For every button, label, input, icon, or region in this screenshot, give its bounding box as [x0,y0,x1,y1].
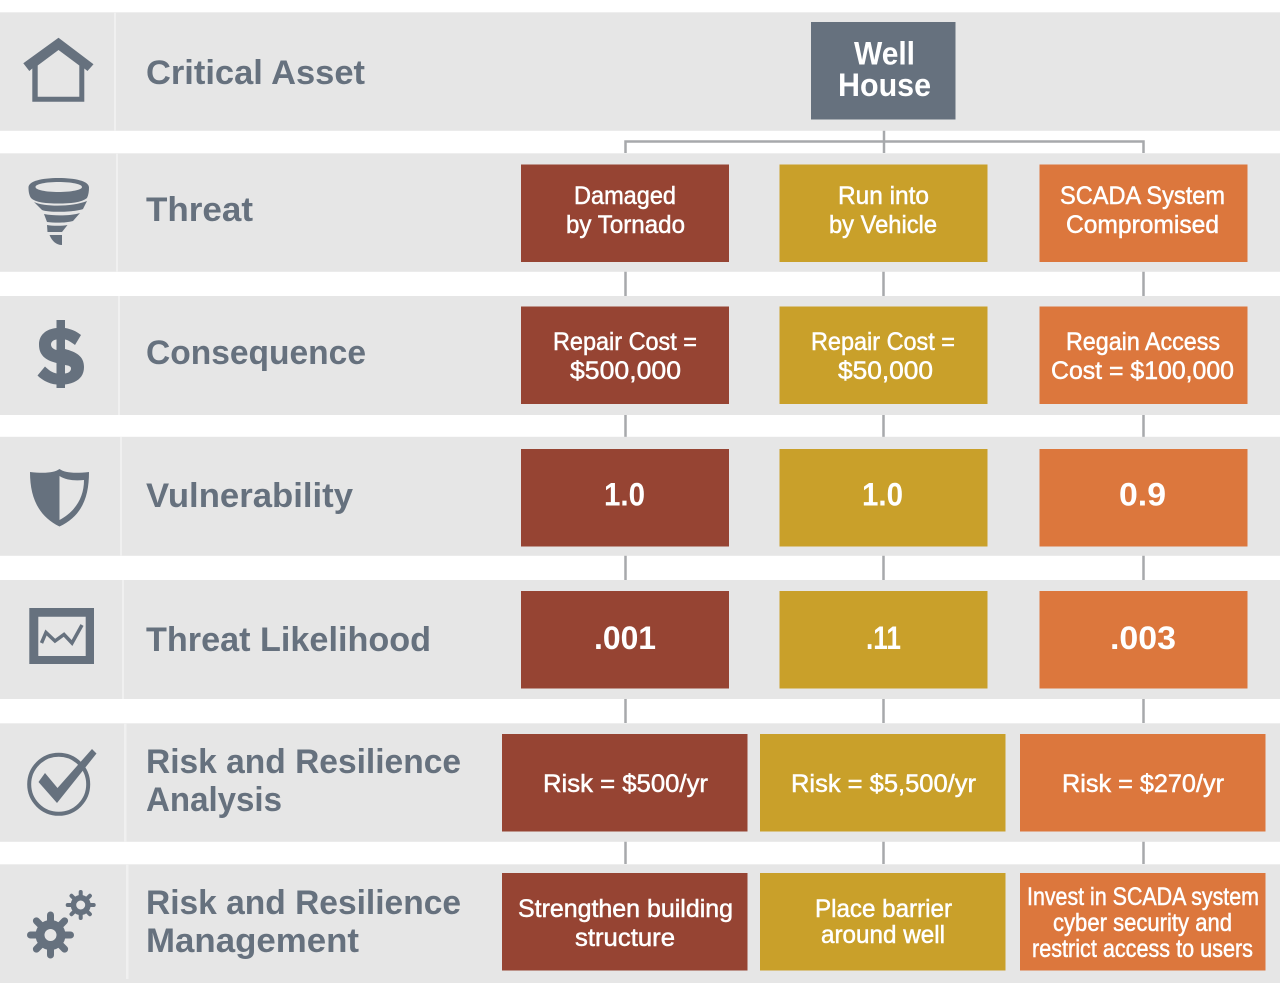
connector lines [626,130,1144,864]
box: risk 270 [1020,734,1266,832]
box: likelihood .001: .001 [594,620,656,656]
row: critical asset [0,12,1280,131]
box: vulnerability 1.0 [780,449,988,546]
box: vulnerability 0.9 [1040,449,1248,546]
box: repair cost 50,000: Repair Cost = [811,328,955,356]
icon: check mark circle [29,749,97,814]
row: risk and resilience analysis [0,723,1280,842]
icon: house [23,38,93,102]
box: repair cost 500,000: $500,000 [570,357,681,385]
row: threat [0,153,1280,272]
box: run into by vehicle: by Vehicle [829,211,937,239]
box: likelihood .003 [1040,591,1248,688]
box: risk 5,500: Risk = $5,500/yr [791,770,976,798]
heading: risk and resilience analysis [146,743,461,819]
icon: line chart [29,608,94,664]
row: risk and resilience management [0,864,1280,983]
box: well house [811,22,956,120]
box: repair cost 50,000: $50,000 [838,357,933,385]
row: consequence [0,296,1280,415]
heading: threat: Threat [146,191,253,229]
box: vulnerability 1.0: 1.0 [862,476,903,512]
heading: consequence: Consequence [146,334,366,372]
box: damaged by tornado: by Tornado [566,211,685,239]
heading: risk and resilience management: Management [146,922,359,960]
box: repair cost 50,000 [780,306,988,404]
box: run into by vehicle [780,164,988,262]
box: likelihood .11: .11 [866,620,901,656]
box: invest in scada: cyber security and [1053,909,1232,937]
box: regain access cost: Regain Access [1066,328,1220,356]
box: strengthen building structure [502,873,748,970]
icon: dollar sign [38,320,84,388]
box: vulnerability 1.0 [521,449,729,546]
heading: risk and resilience management [146,884,461,960]
box: risk 500: Risk = $500/yr [543,770,708,798]
box: scada system compromised: SCADA System [1060,182,1225,210]
box: repair cost 500,000 [521,306,729,404]
icon: gears [30,892,94,955]
box: damaged by tornado: Damaged [574,182,676,210]
box: invest in scada [1020,873,1266,970]
box: repair cost 500,000: Repair Cost = [553,328,697,356]
box: regain access cost [1040,306,1248,404]
box: risk 270: Risk = $270/yr [1062,770,1224,798]
heading: vulnerability: Vulnerability [146,477,353,515]
box: well house: House [838,67,931,103]
box: strengthen building structure: structure [575,924,675,952]
heading: threat likelihood: Threat Likelihood [146,621,431,659]
box: place barrier around well [760,873,1006,970]
row: threat likelihood [0,580,1280,699]
box: scada system compromised [1040,164,1248,262]
box: run into by vehicle: Run into [838,182,929,210]
box: likelihood .001 [521,591,729,688]
heading: risk and resilience management: Risk and Resilience [146,884,461,922]
box: likelihood .11 [780,591,988,688]
box: strengthen building structure: Strengthen building [518,895,733,923]
box: vulnerability 0.9: 0.9 [1119,476,1166,512]
box: place barrier around well: around well [821,921,945,949]
box: likelihood .003: .003 [1110,620,1176,656]
icon: shield [30,469,89,526]
heading: risk and resilience analysis: Risk and Resilience [146,743,461,781]
box: vulnerability 1.0: 1.0 [604,476,645,512]
box: damaged by tornado [521,164,729,262]
box: risk 500 [502,734,748,832]
box: invest in scada: restrict access to users [1032,935,1253,963]
box: place barrier around well: Place barrier [815,895,952,923]
heading: risk and resilience analysis: Analysis [146,781,282,819]
box: regain access cost: Cost = $100,000 [1051,357,1234,385]
heading: critical asset: Critical Asset [146,54,365,92]
icon: tornado [28,178,89,245]
row: vulnerability [0,437,1280,556]
box: well house: Well [854,36,915,72]
box: scada system compromised: Compromised [1066,211,1219,239]
box: risk 5,500 [760,734,1006,832]
